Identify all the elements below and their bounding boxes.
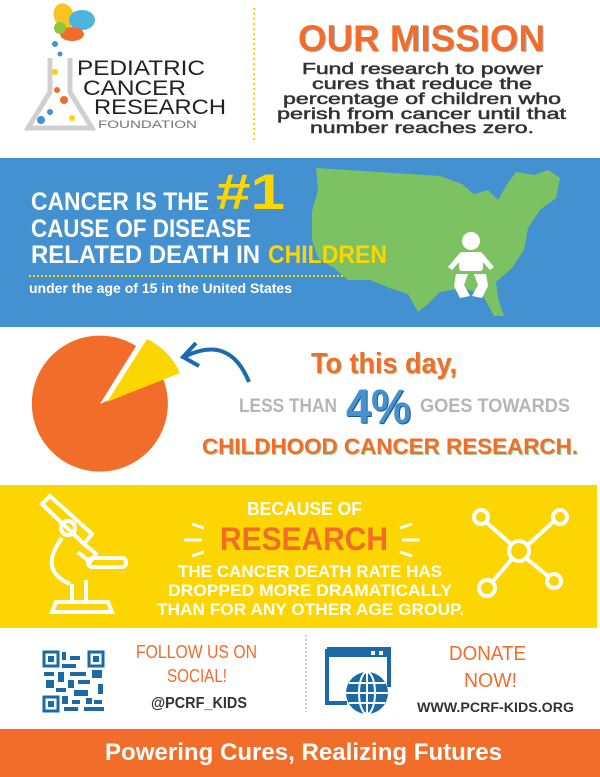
text: donate: DONATE <box>449 643 526 665</box>
logo <box>28 0 226 131</box>
text: to this day: LESS THAN <box>239 396 337 417</box>
icon: baby <box>448 232 494 298</box>
heading: cancer is the #1: CHILDREN <box>268 241 387 269</box>
heading: because of research <box>220 499 388 557</box>
logo: PEDIATRIC <box>77 57 205 80</box>
arrow <box>183 343 249 382</box>
map: USA <box>312 168 560 316</box>
text: to this day: 4% <box>347 382 412 435</box>
heading: cancer is the #1: CANCER IS THE <box>31 188 209 216</box>
icon: butterfly <box>50 0 95 41</box>
text: death rate <box>157 562 464 619</box>
text: follow us: FOLLOW US ON <box>136 642 257 662</box>
panel: yellow band <box>0 485 597 628</box>
text: death rate: DROPPED MORE DRAMATICALLY <box>168 581 453 600</box>
footer: Powering Cures, Realizing Futures <box>105 739 502 766</box>
icon: QR code <box>44 652 104 711</box>
text: to this day: To this day, <box>311 348 457 380</box>
text: mission: cures that reduce the <box>312 76 532 93</box>
heading: cancer is the #1: #1 <box>216 164 285 220</box>
text: to this day <box>202 348 579 460</box>
text: donate <box>417 643 574 715</box>
text: death rate: THE CANCER DEATH RATE HAS <box>178 562 442 581</box>
text: to this day: 4% <box>346 381 411 434</box>
text: mission: perish from cancer until that <box>277 106 567 123</box>
panel: blue band <box>0 158 600 327</box>
text: to this day: CHILDHOOD CANCER RESEARCH. <box>202 434 578 459</box>
text: mission: Fund research to power <box>302 61 544 78</box>
heading: cancer is the #1 <box>31 164 387 269</box>
text: follow us: @PCRF_KIDS <box>151 695 247 712</box>
text: donate: NOW! <box>464 670 517 692</box>
icon: molecule <box>474 510 567 596</box>
text: to this day: To this day, <box>312 349 458 381</box>
heading: our mission: OUR MISSION <box>299 19 546 60</box>
logo: RESEARCH <box>94 96 226 119</box>
footer <box>0 729 600 777</box>
text: mission: percentage of children who <box>283 91 561 108</box>
text: OUR MISSION <box>298 18 545 59</box>
heading: because of research: RESEARCH <box>220 521 388 557</box>
heading: cancer is the #1: CAUSE OF DISEASE <box>31 215 251 243</box>
text: mission <box>277 61 567 137</box>
icon: web globe <box>327 649 389 714</box>
icon: flask <box>28 58 92 128</box>
chart: pie <box>32 336 180 472</box>
heading: cancer is the #1: RELATED DEATH IN <box>31 241 260 269</box>
text: follow us: SOCIAL! <box>167 666 227 686</box>
heading: because of research: BECAUSE OF <box>247 499 362 519</box>
text: to this day: GOES TOWARDS <box>420 396 570 417</box>
text: death rate: THAN FOR ANY OTHER AGE GROUP. <box>157 600 464 619</box>
text: mission: number reaches zero. <box>310 120 534 137</box>
text: follow us <box>136 642 257 712</box>
text: donate: WWW.PCRF-KIDS.ORG <box>417 699 574 715</box>
logo: FOUNDATION <box>98 119 197 131</box>
text: under 15: under the age of 15 in the United States <box>29 280 292 296</box>
icon: microscope <box>42 496 126 612</box>
logo: CANCER <box>83 77 186 100</box>
text: to this day: CHILDHOOD CANCER RESEARCH. <box>203 435 579 460</box>
